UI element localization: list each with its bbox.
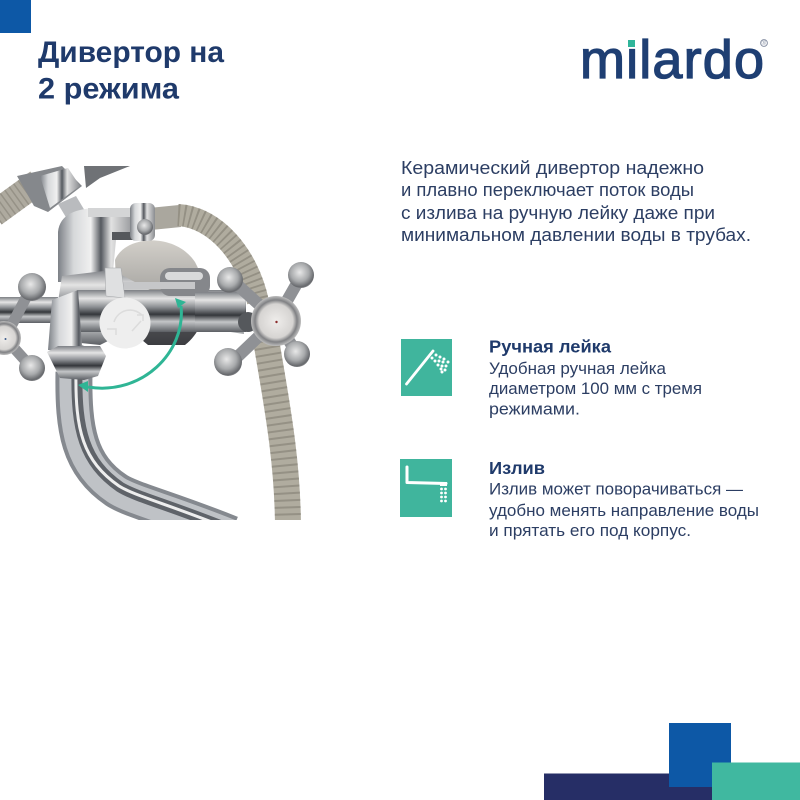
description text: Керамический дивертор надежно — [401, 157, 704, 178]
diverter lever with white knob — [100, 268, 150, 348]
icon: hand shower — [401, 339, 452, 396]
logo: milardo: ® — [762, 40, 767, 47]
vertical body and elbow — [58, 208, 138, 282]
feature: hand shower text: Ручная лейка — [489, 336, 611, 356]
feature: hand shower text: диаметром 100 мм с тремя — [489, 379, 702, 398]
hose: lower right — [266, 340, 288, 530]
description text: с излива на ручную лейку даже при — [401, 202, 715, 223]
feature: spout text: и прятать его под корпус. — [489, 521, 691, 540]
feature: hand shower text: Удобная ручная лейка — [489, 359, 667, 378]
corner blocks: bottom right — [544, 723, 800, 800]
description text — [401, 157, 751, 245]
main horizontal body — [52, 268, 246, 345]
description text: и плавно переключает поток воды — [401, 179, 694, 200]
spout nut — [47, 346, 106, 380]
faucet photo illustration — [0, 166, 314, 534]
feature: spout text — [489, 458, 759, 540]
left cross handle — [0, 273, 46, 381]
feature: spout text: Излив — [489, 458, 545, 478]
left valve block — [48, 290, 84, 350]
icon: spout — [400, 459, 452, 517]
hose: upper left — [0, 182, 38, 214]
feature: spout text: Излив может поворачиваться — — [489, 480, 743, 498]
feature: spout text: удобно менять направление воды — [489, 501, 759, 520]
teal arrow — [78, 298, 186, 392]
wall flange — [115, 240, 205, 345]
left pipe — [0, 297, 58, 323]
spout — [74, 372, 234, 534]
title: 2 режима — [38, 72, 179, 106]
right cross handle — [214, 262, 314, 376]
title: Дивертор на — [38, 36, 224, 69]
hose: upper right — [150, 215, 258, 302]
description text: минимальном давлении воды в трубах. — [401, 224, 751, 245]
hand shower stub — [84, 166, 130, 188]
logo: milardo: milardo — [580, 30, 764, 90]
hose holder — [17, 166, 84, 216]
corner square: top left — [0, 0, 31, 33]
hose nut — [130, 203, 155, 241]
feature: hand shower text — [489, 336, 702, 418]
feature: hand shower text: режимами. — [489, 400, 580, 418]
title — [38, 36, 224, 106]
